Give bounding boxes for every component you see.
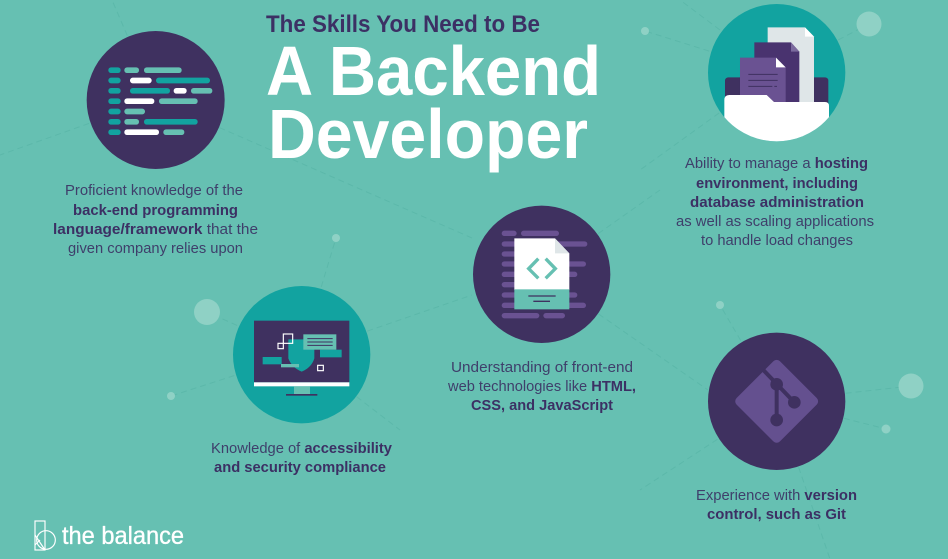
text: version control line 2: control, such as Git bbox=[707, 506, 846, 523]
text: front-end line 3: CSS, and JavaScript bbox=[471, 397, 613, 414]
text: front-end: Understanding of front-end bbox=[451, 359, 633, 376]
title: Developer bbox=[268, 95, 588, 173]
title: The Skills You Need to Be bbox=[266, 11, 540, 38]
text: hosting environment line 4: as well as scaling applications bbox=[676, 213, 874, 230]
icon: monitor with shield bbox=[233, 286, 370, 423]
text: programming language framework: language/framework that the bbox=[53, 221, 258, 238]
text: programming language: Proficient knowledge of the bbox=[65, 182, 243, 199]
text: programming language bold: back-end programming bbox=[73, 202, 238, 219]
text: accessibility: Knowledge of accessibility bbox=[211, 440, 393, 457]
text: hosting environment line 2: environment, including bbox=[696, 175, 858, 192]
icon: code editor bbox=[87, 31, 225, 169]
text: hosting environment line 5: to handle load changes bbox=[701, 232, 853, 249]
text: accessibility line 2: and security compliance bbox=[214, 459, 386, 476]
background node circles bbox=[167, 12, 924, 434]
text: hosting environment line 3: database administration bbox=[690, 194, 864, 211]
icon: git logo bbox=[708, 333, 845, 470]
text: programming language end: given company relies upon bbox=[68, 240, 243, 257]
icon: code document bbox=[473, 206, 610, 343]
text: front-end line 2: web technologies like HTML, bbox=[447, 378, 636, 395]
icon: folder with documents bbox=[708, 4, 845, 147]
title bbox=[266, 11, 601, 173]
text: hosting environment: Ability to manage a hosting bbox=[685, 155, 868, 172]
title: A Backend bbox=[266, 32, 601, 110]
logo: the balance: the balance bbox=[62, 522, 184, 550]
text: version control: Experience with version bbox=[696, 487, 857, 504]
